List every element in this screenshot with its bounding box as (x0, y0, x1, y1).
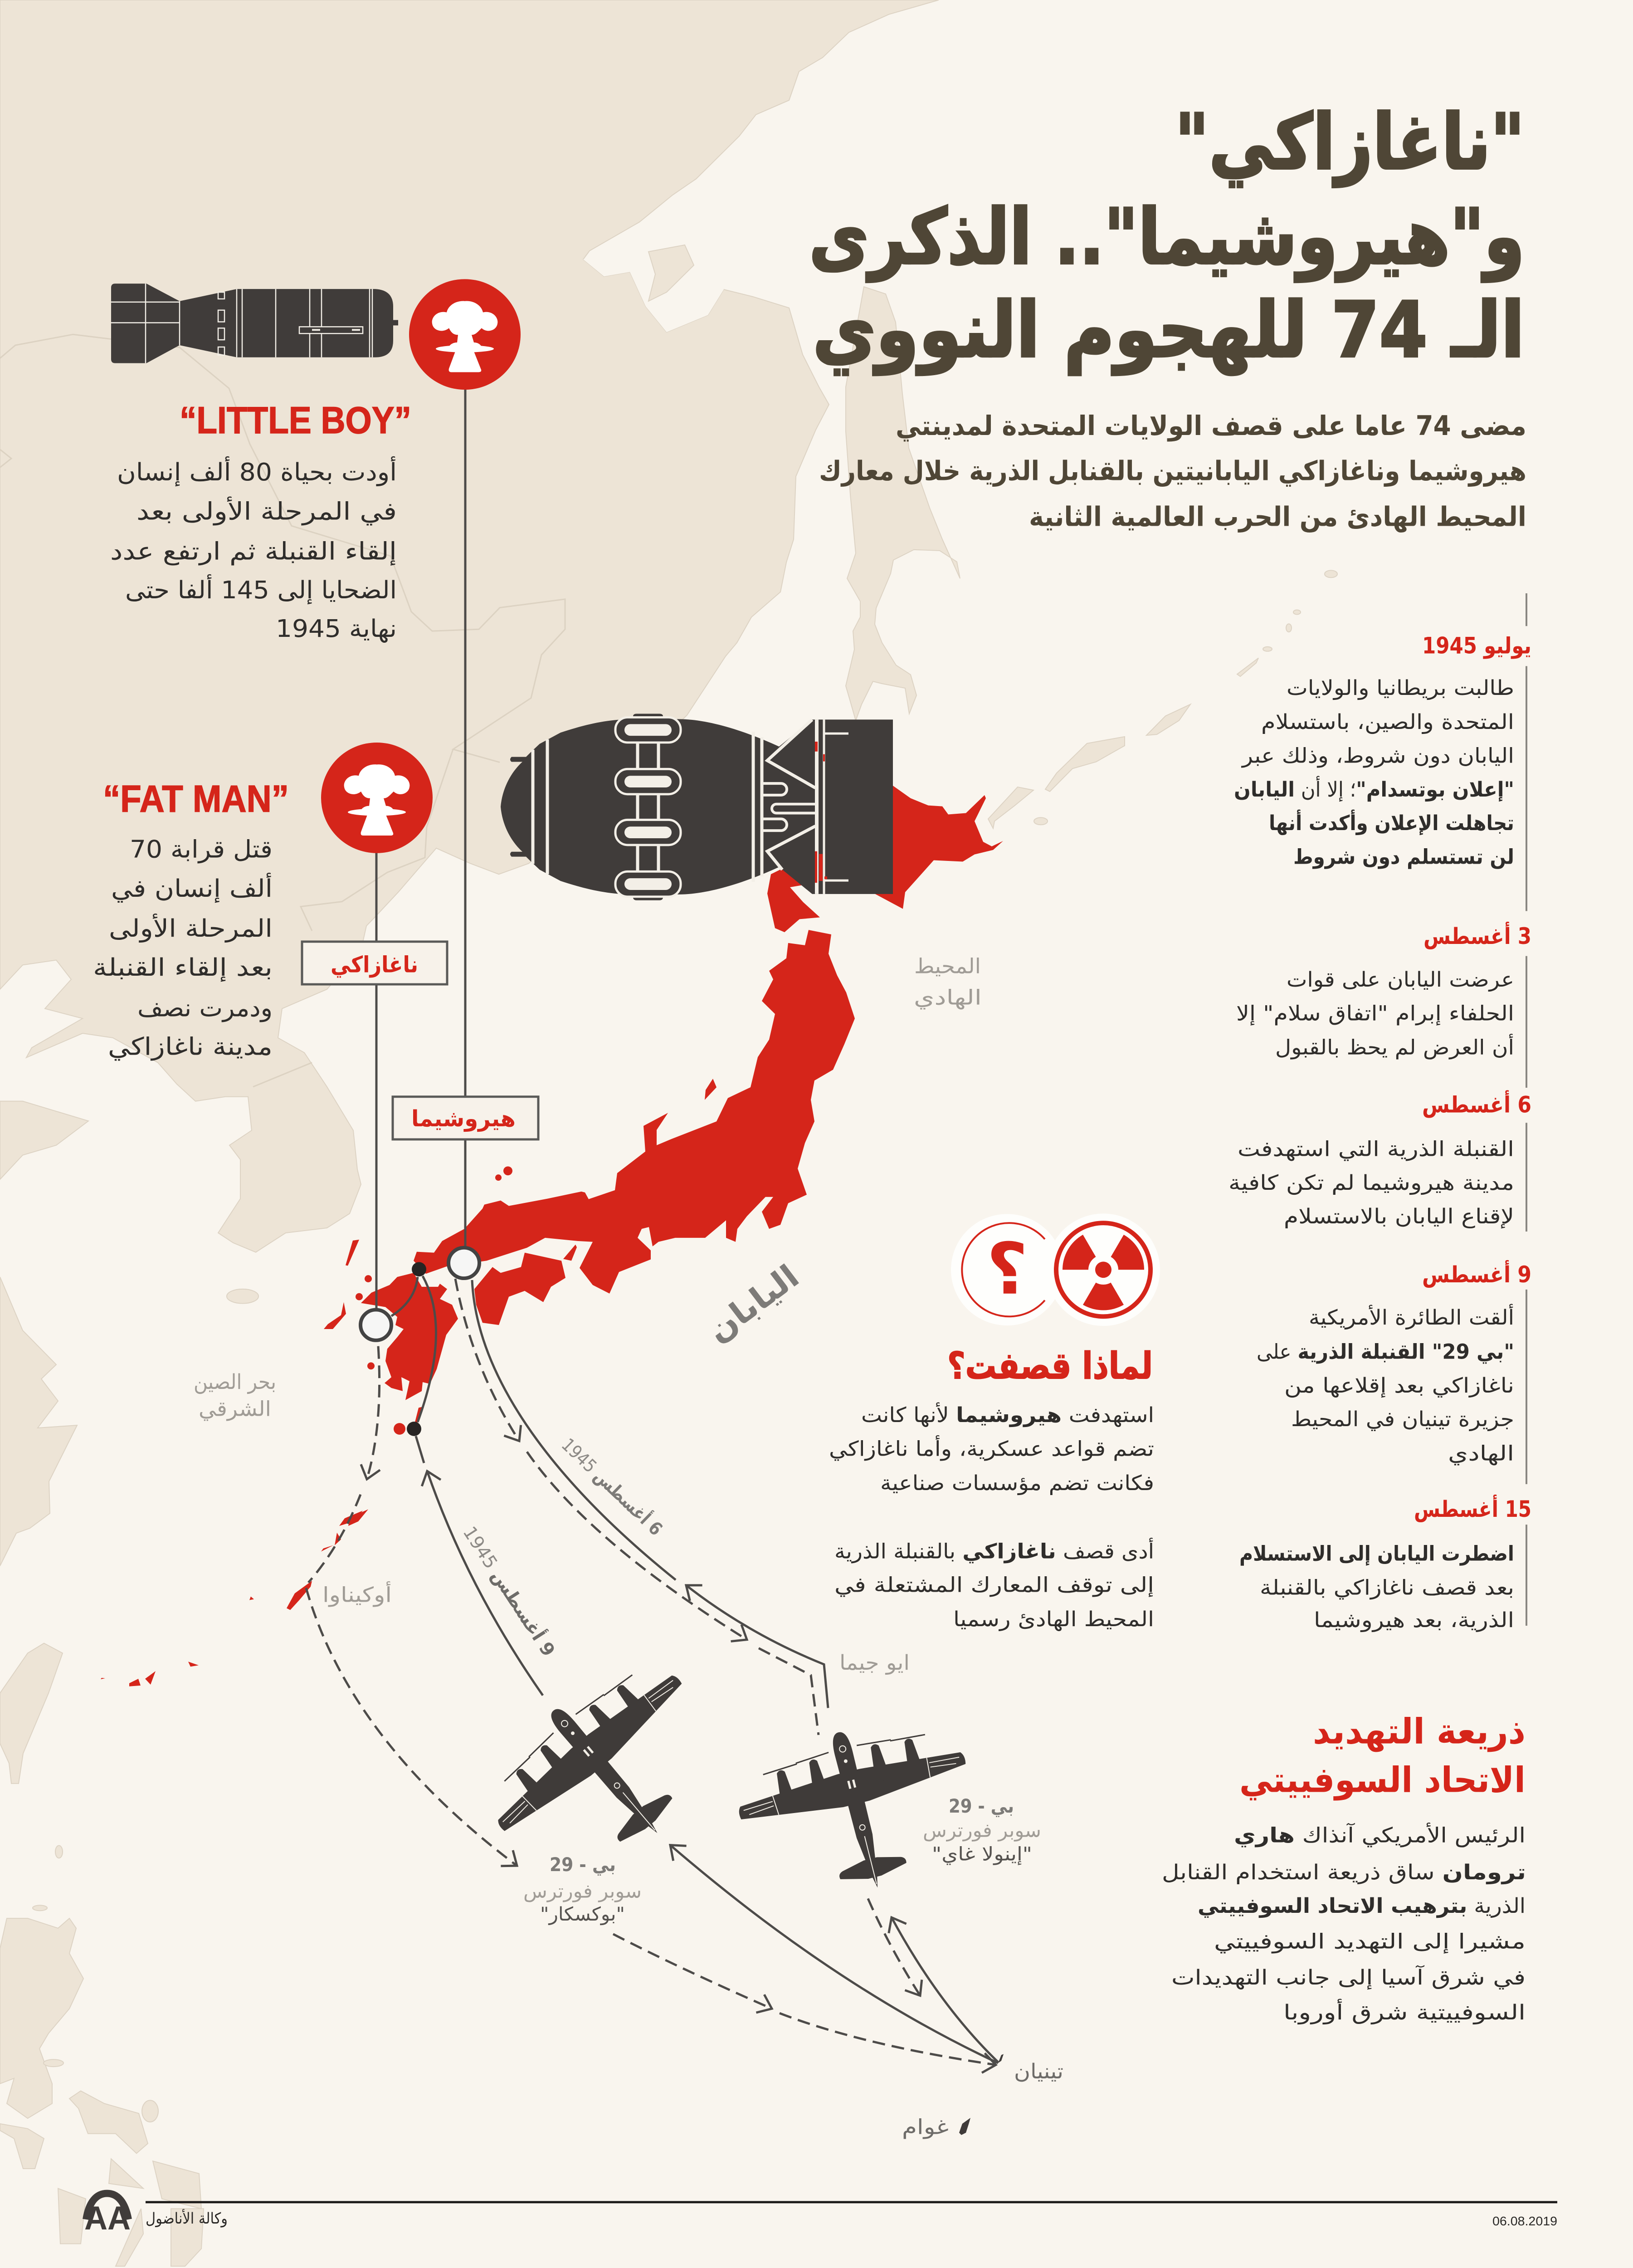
plane label: Bockscar: سوبر فورترس (523, 1880, 642, 1902)
text: Soviet threat body: مشيرا إلى التهديد السوفييتي (1214, 1929, 1526, 1954)
timeline: 9 August: "بي 29" القنبلة الذرية على (1257, 1339, 1514, 1364)
text: why body: استهدفت هيروشيما لأنها كانت (861, 1402, 1154, 1427)
icon: mushroom cloud, Little Boy (409, 279, 521, 390)
timeline: 6 August (1228, 1090, 1531, 1228)
route label: 9 August 1945: 9 أغسطس 1945 (458, 1522, 561, 1660)
text: Little Boy: في المرحلة الأولى بعد (136, 496, 397, 525)
timeline: 9 August: جزيرة تينيان في المحيط (1291, 1407, 1514, 1432)
timeline: 3 August (1236, 921, 1531, 1060)
text: Soviet threat body: الرئيس الأمريكي آنذاك هاري (1234, 1822, 1526, 1848)
map label: East China Sea: بحر الصين (194, 1369, 276, 1394)
text: Soviet threat body: ترومان ساق ذريعة استخدام القنابل (1162, 1860, 1526, 1884)
plane label: Enola Gay: بي - 29 (949, 1795, 1014, 1818)
footer agency name: وكالة الأناضول (146, 2209, 228, 2228)
label box: Nagasaki: ناغازاكي (331, 951, 418, 978)
timeline: 3 August: 3 أغسطس (1423, 921, 1531, 949)
footer date: 06.08.2019 (1492, 2214, 1557, 2228)
heading: Soviet threat (1239, 1711, 1526, 1801)
timeline: July 1945: "إعلان بوتسدام"؛ إلا أن اليابان (1234, 776, 1514, 802)
timeline: 9 August: ألقت الطائرة الأمريكية (1309, 1304, 1514, 1330)
text: Fat Man: المرحلة الأولى (109, 913, 273, 943)
text: Soviet threat body (1162, 1822, 1526, 2025)
logo: Anadolu Agency: AA (84, 2199, 131, 2237)
text: why body: تضم قواعد عسكرية، وأما ناغازاكي (829, 1435, 1154, 1461)
timeline: 6 August: 6 أغسطس (1422, 1090, 1531, 1118)
text: Fat Man: قتل قرابة 70 (130, 835, 273, 864)
map label: Pacific Ocean (914, 953, 982, 1010)
timeline: 15 August: بعد قصف ناغازاكي بالقنبلة (1260, 1575, 1514, 1600)
timeline: 15 August: اضطرت اليابان إلى الاستسلام (1239, 1541, 1514, 1566)
timeline: July 1945: لن تستسلم دون شروط (1293, 845, 1514, 869)
map label: Pacific Ocean: الهادي (914, 985, 982, 1010)
icon: Little Boy bomb (111, 284, 398, 363)
text: why body: أدى قصف ناغازاكي بالقنبلة الذرية (834, 1538, 1154, 1563)
marker: Kokura waypoint (412, 1262, 426, 1276)
title: الـ 74 للهجوم النووي (813, 285, 1525, 376)
timeline: 3 August: أن العرض لم يحظ بالقبول (1275, 1034, 1514, 1060)
map label: Pacific Ocean: المحيط (914, 953, 981, 978)
text: Fat Man: ألف إنسان في (111, 872, 273, 903)
heading: Soviet threat: الاتحاد السوفييتي (1239, 1760, 1526, 1801)
icon: question mark badge (951, 1214, 1063, 1325)
timeline: July 1945: المتحدة والصين، باستسلام (1261, 709, 1514, 734)
text: Little Boy: الضحايا إلى 145 ألفا حتى (125, 574, 397, 604)
plane label: Enola Gay: سوبر فورترس (923, 1819, 1041, 1842)
text: Little Boy: أودت بحياة 80 ألف إنسان (117, 456, 397, 486)
plane label: Enola Gay (923, 1795, 1041, 1865)
timeline: 15 August: 15 أغسطس (1414, 1494, 1531, 1522)
text: why body: إلى توقف المعارك المشتعلة في (834, 1573, 1154, 1598)
timeline: 3 August: الحلفاء إبرام "اتفاق سلام" إلا (1236, 1001, 1514, 1026)
route label: 6 August 1945: 6 أغسطس 1945 (557, 1433, 668, 1540)
timeline: 9 August (1257, 1260, 1531, 1465)
flight routes (306, 1276, 998, 2065)
icon: Fat Man bomb (501, 714, 893, 900)
heading: why: لماذا قصفت؟ (947, 1344, 1153, 1388)
label box: Nagasaki (302, 942, 447, 984)
intro text (819, 411, 1526, 533)
map label: Iwo Jima: ايو جيما (839, 1650, 910, 1675)
icon: Tinian island (998, 2054, 1004, 2063)
plane: B-29 Bockscar (464, 1637, 746, 1907)
map label: Japan: اليابان (700, 1257, 806, 1349)
timeline: July 1945 (1234, 633, 1531, 869)
timeline: 6 August: لإقناع اليابان بالاستسلام (1284, 1204, 1514, 1228)
text: Little Boy: إلقاء القنبلة ثم ارتفع عدد (110, 537, 397, 566)
marker: Nagasaki (361, 1310, 391, 1340)
icon: Guam island (959, 2118, 970, 2135)
plane label: Bockscar: "بوكسكار" (540, 1903, 625, 1925)
text: Fat Man: ودمرت نصف (137, 994, 273, 1022)
plane label: Bockscar: بي - 29 (550, 1853, 616, 1876)
text: Little Boy: نهاية 1945 (276, 614, 397, 643)
text: Little Boy (110, 456, 397, 643)
map: Japan in red (101, 786, 1003, 1686)
timeline: 9 August: 9 أغسطس (1422, 1260, 1531, 1288)
intro text: مضى 74 عاما على قصف الولايات المتحدة لمدينتي (896, 411, 1526, 442)
marker: southern waypoint (407, 1422, 421, 1436)
text: why body: المحيط الهادئ رسميا (953, 1607, 1154, 1631)
title: و"هيروشيما".. الذكرى (809, 192, 1525, 282)
intro text: المحيط الهادئ من الحرب العالمية الثانية (1029, 502, 1526, 533)
map label: East China Sea: الشرقي (199, 1396, 271, 1421)
timeline: 9 August: الهادي (1448, 1441, 1514, 1465)
map label: Guam: غوام (902, 2115, 949, 2140)
text: Soviet threat body: السوفييتية شرق أوروبا (1283, 1999, 1526, 2025)
plane label: Bockscar (523, 1853, 642, 1925)
icon: question mark badge: ؟ (986, 1228, 1028, 1311)
map label: Okinawa: أوكيناوا (322, 1581, 392, 1607)
timeline: July 1945: تجاهلت الإعلان وأكدت أنها (1269, 809, 1514, 835)
timeline: 15 August (1239, 1494, 1531, 1633)
title (809, 98, 1525, 376)
heading: Little Boy: “LITTLE BOY” (180, 399, 411, 441)
text: why body (829, 1402, 1154, 1631)
panel: Soviet threat pretext (1162, 1711, 1526, 2025)
timeline: July 1945: اليابان دون شروط، وذلك عبر (1241, 743, 1514, 768)
timeline: 6 August: القنبلة الذرية التي استهدفت (1238, 1137, 1514, 1161)
intro text: هيروشيما وناغازاكي اليابانيتين بالقنابل الذرية خلال معارك (819, 456, 1526, 487)
title: "ناغازاكي" (1175, 98, 1525, 187)
text: Fat Man: مدينة ناغازاكي (108, 1032, 273, 1061)
heading: Soviet threat: ذريعة التهديد (1313, 1711, 1526, 1752)
marker: Hiroshima (448, 1248, 479, 1278)
text: Soviet threat body: الذرية بترهيب الاتحاد السوفييتي (1198, 1893, 1526, 1918)
timeline: 15 August: الذرية، بعد هيروشيما (1314, 1608, 1514, 1633)
label box: Hiroshima (393, 1097, 538, 1139)
timeline: 3 August: عرضت اليابان على قوات (1287, 967, 1514, 992)
text: why body: فكانت تضم مؤسسات صناعية (880, 1471, 1154, 1496)
timeline rule (1526, 593, 1527, 1626)
map label: East China Sea (194, 1369, 276, 1421)
text: Fat Man: بعد إلقاء القنبلة (93, 953, 273, 982)
text: Soviet threat body: في شرق آسيا إلى جانب التهديدات (1171, 1965, 1526, 1990)
panel: why were they bombed (829, 1344, 1154, 1631)
leader lines from bomb icons to cities (376, 386, 465, 1312)
icon: mushroom cloud, Fat Man (321, 743, 433, 853)
heading: Fat Man: “FAT MAN” (103, 777, 289, 820)
timeline: July 1945: طالبت بريطانيا والولايات (1287, 675, 1514, 700)
footer rule (146, 2201, 1557, 2203)
label box: Hiroshima: هيروشيما (411, 1105, 516, 1132)
text: Fat Man (93, 835, 273, 1061)
plane: B-29 Enola Gay (726, 1705, 990, 1916)
timeline: 9 August: ناغازاكي بعد إقلاعها من (1284, 1373, 1514, 1398)
map label: Tinian: تينيان (1014, 2059, 1063, 2083)
icon: radiation badge (1047, 1213, 1160, 1326)
plane label: Enola Gay: "إينولا غاي" (932, 1843, 1032, 1865)
timeline: July 1945: يوليو 1945 (1422, 633, 1531, 660)
timeline: 6 August: مدينة هيروشيما لم تكن كافية (1228, 1170, 1514, 1195)
